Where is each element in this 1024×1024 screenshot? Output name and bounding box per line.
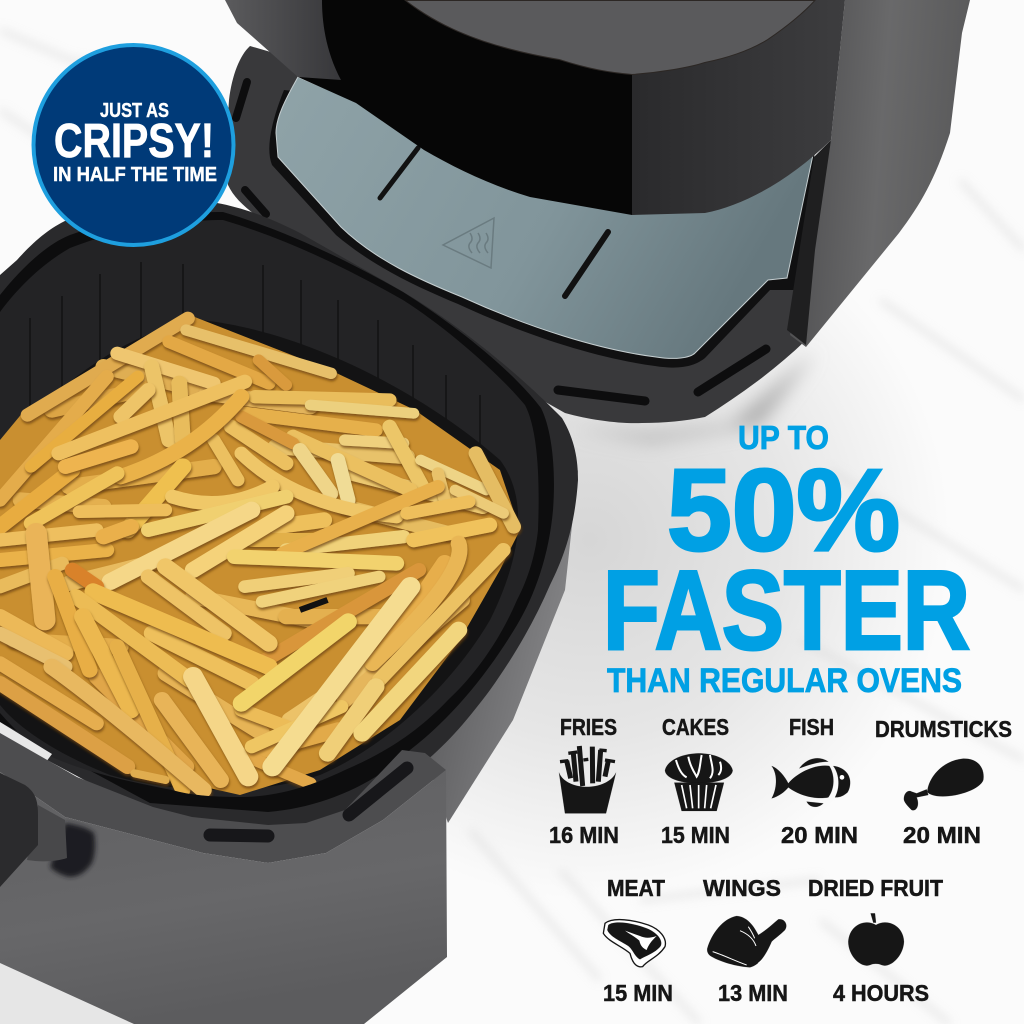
icon: hot surface warning triangle (443, 218, 494, 268)
item: fries 16 min: 16 MIN (549, 822, 619, 848)
fries pile (0, 315, 520, 795)
item: wings 13 min: 13 MIN (718, 980, 788, 1006)
item: cakes 15 min: CAKES (662, 714, 729, 740)
basket silver body (420, 470, 578, 823)
basket vertical ribs (30, 262, 480, 450)
frame slots (236, 82, 766, 401)
top grey control housing (404, 0, 816, 75)
headline: up to 50% faster: 50% (667, 445, 900, 575)
badge: just as crispy: JUST AS (100, 100, 169, 122)
item: drumsticks 20 min: 20 MIN (903, 822, 981, 848)
air fryer main unit (225, 0, 970, 442)
item: wings 13 min: WINGS (703, 875, 781, 901)
soft shadow under unit (570, 352, 815, 442)
item: fish 20 min: FISH (789, 714, 834, 740)
handle (0, 773, 95, 887)
glossy black front (298, 0, 632, 215)
item: drumsticks 20 min (875, 716, 1012, 848)
item: fish 20 min (772, 714, 858, 848)
basket outer rim (0, 203, 578, 830)
cooking times grid (549, 714, 1012, 1006)
badge: just as crispy: CRIPSY! (54, 115, 214, 168)
right front band (632, 0, 845, 215)
item: dried fruit 4 hours: DRIED FRUIT (808, 875, 943, 901)
fry basket drawer (0, 203, 578, 1024)
badge: just as crispy (34, 45, 234, 245)
headline: up to 50% faster (603, 419, 970, 700)
headline: up to 50% faster: THAN REGULAR OVENS (607, 662, 962, 700)
left grey face (225, 0, 341, 80)
headline: up to 50% faster: UP TO (738, 419, 829, 456)
drawer tray frame (227, 46, 812, 423)
item: drumsticks 20 min: DRUMSTICKS (875, 716, 1012, 742)
drawer front collar (0, 733, 446, 863)
item: fries 16 min (549, 714, 619, 848)
item: meat 15 min (603, 875, 673, 1006)
right side body (790, 0, 970, 347)
basket floor (0, 320, 518, 790)
white sliver behind collar (0, 722, 52, 762)
item: dried fruit 4 hours: 4 HOURS (833, 980, 929, 1006)
item: cakes 15 min (661, 714, 733, 848)
basket interior wall (0, 220, 539, 797)
collar slots (210, 768, 407, 836)
item: meat 15 min: 15 MIN (603, 980, 673, 1006)
badge: just as crispy: IN HALF THE TIME (53, 164, 217, 186)
item: meat 15 min: MEAT (607, 875, 665, 901)
item: dried fruit 4 hours (808, 875, 943, 1006)
item: wings 13 min (703, 875, 788, 1006)
front panel (0, 770, 447, 1024)
item: cakes 15 min: 15 MIN (661, 822, 730, 848)
item: fries 16 min: FRIES (560, 714, 617, 740)
heat shield tray plate (276, 77, 814, 358)
item: fish 20 min: 20 MIN (781, 822, 858, 848)
